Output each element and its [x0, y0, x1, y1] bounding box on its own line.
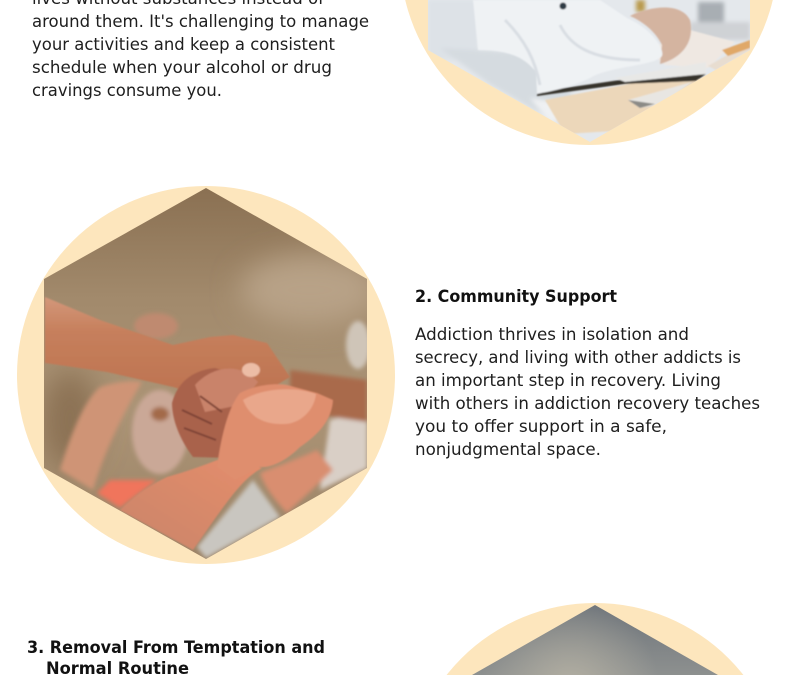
text block: section 1 body: cravings consume you.: [32, 81, 222, 100]
text block: section 2 body: Addiction thrives in isolation and: [415, 325, 689, 344]
image: section 3 photo in hexagon frame: [446, 603, 744, 675]
text block: section 2 body: secrecy, and living with other addicts is: [415, 348, 741, 367]
text block: section 1 body: your activities and keep a consistent: [32, 35, 336, 54]
text block: section 2 body: an important step in recovery. Living: [415, 371, 721, 390]
image: doctor writing in hexagon frame: [400, 0, 778, 150]
heading: 2. Community Support: 2. Community Support: [415, 287, 617, 307]
text block: section 2 body: with others in addiction recovery teaches: [415, 394, 760, 413]
heading: 3. Removal From Temptation and Normal Routine: 3. Removal From Temptation and: [27, 638, 325, 658]
image: stacked hands in hexagon frame: [17, 186, 395, 564]
text block: section 1 body: [32, 0, 369, 100]
text block: section 2 body: nonjudgmental space.: [415, 440, 601, 459]
text block: section 1 body: around them. It's challenging to manage: [32, 12, 369, 31]
text block: section 2 body: you to offer support in a safe,: [415, 417, 667, 436]
text block: section 1 body: schedule when your alcohol or drug: [32, 58, 332, 77]
text block: section 2 body: [415, 325, 760, 459]
heading: 3. Removal From Temptation and Normal Routine: [27, 638, 325, 675]
